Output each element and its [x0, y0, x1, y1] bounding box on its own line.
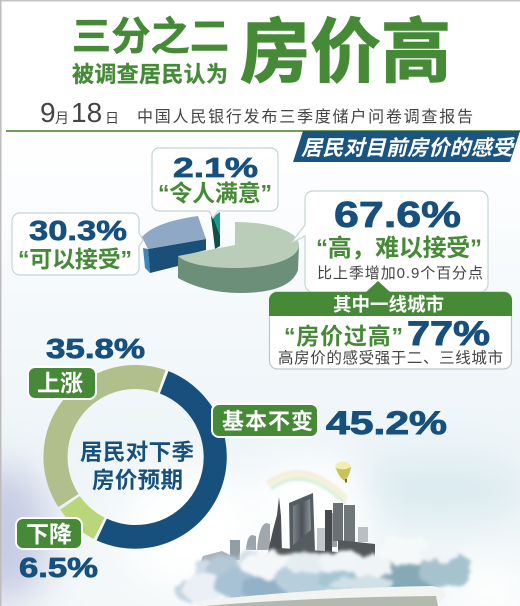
skyline: [198, 493, 375, 568]
callout: too high: 67.6%: [334, 194, 461, 235]
date line: 日: [105, 110, 119, 126]
3D pie chart: [142, 212, 299, 293]
callout: too high: “高，难以接受”: [316, 235, 482, 262]
label: falling: [16, 518, 82, 549]
callout: acceptable: “可以接受”: [18, 246, 132, 272]
rainbow: [267, 472, 347, 504]
label: rising: 上涨: [37, 370, 83, 396]
callout: satisfied: 2.1%: [173, 152, 258, 183]
banner: feelings on current prices: 居民对目前房价的感受: [300, 135, 518, 160]
callout: too high: 比上季增加0.9个百分点: [317, 265, 483, 282]
panel: first-tier cities: [269, 281, 512, 369]
date line: 9: [40, 97, 56, 128]
hot air balloon: [335, 462, 351, 482]
callout: acceptable: [12, 213, 143, 275]
number: 6.5%: 6.5%: [19, 552, 98, 583]
label: prices too high: “房价过高”: [284, 323, 403, 349]
label: unchanged: [212, 404, 318, 437]
date line: 月: [55, 110, 69, 126]
number: 77%: 77%: [407, 315, 490, 353]
date line: 中国人民银行发布三季度储户问卷调查报告: [137, 108, 473, 126]
title: two thirds: 三分之二: [72, 16, 229, 59]
illustration: city on clouds: [174, 462, 471, 606]
label: falling: 下降: [26, 521, 72, 547]
label: rising: [28, 367, 96, 399]
segment: unchanged: [97, 371, 227, 549]
label: unchanged: 基本不变: [222, 409, 313, 434]
date line: [40, 97, 473, 128]
heading: 其中一线城市: [333, 294, 444, 315]
segment: falling: [60, 496, 105, 539]
background haze: [0, 455, 520, 606]
subtitle: surveyed residents: 被调查居民认为: [72, 62, 228, 87]
center label: 居民对下季: [80, 440, 194, 465]
slice: acceptable 30.3%: [142, 216, 206, 273]
cloud mass: [174, 537, 471, 602]
center label: 房价预期: [92, 468, 183, 493]
center label: [80, 440, 194, 493]
callout: acceptable: 30.3%: [29, 215, 127, 246]
note: 高房价的感受强于二、三线城市: [278, 349, 503, 367]
segment: rising: [43, 365, 166, 507]
title: [72, 13, 451, 91]
title: house prices high: 房价高: [240, 13, 451, 91]
callout: satisfied: “令人满意”: [158, 180, 272, 206]
donut chart: [43, 365, 227, 549]
number: 35.8%: 35.8%: [46, 333, 145, 364]
date line: 18: [71, 97, 102, 128]
callout: satisfied: [152, 148, 278, 218]
platform: [192, 586, 446, 606]
slice: satisfied 2.1%: [211, 212, 220, 249]
slice: high 67.6%: [178, 222, 299, 293]
callout: too high: [291, 191, 488, 292]
number: 45.2%: 45.2%: [326, 405, 447, 441]
